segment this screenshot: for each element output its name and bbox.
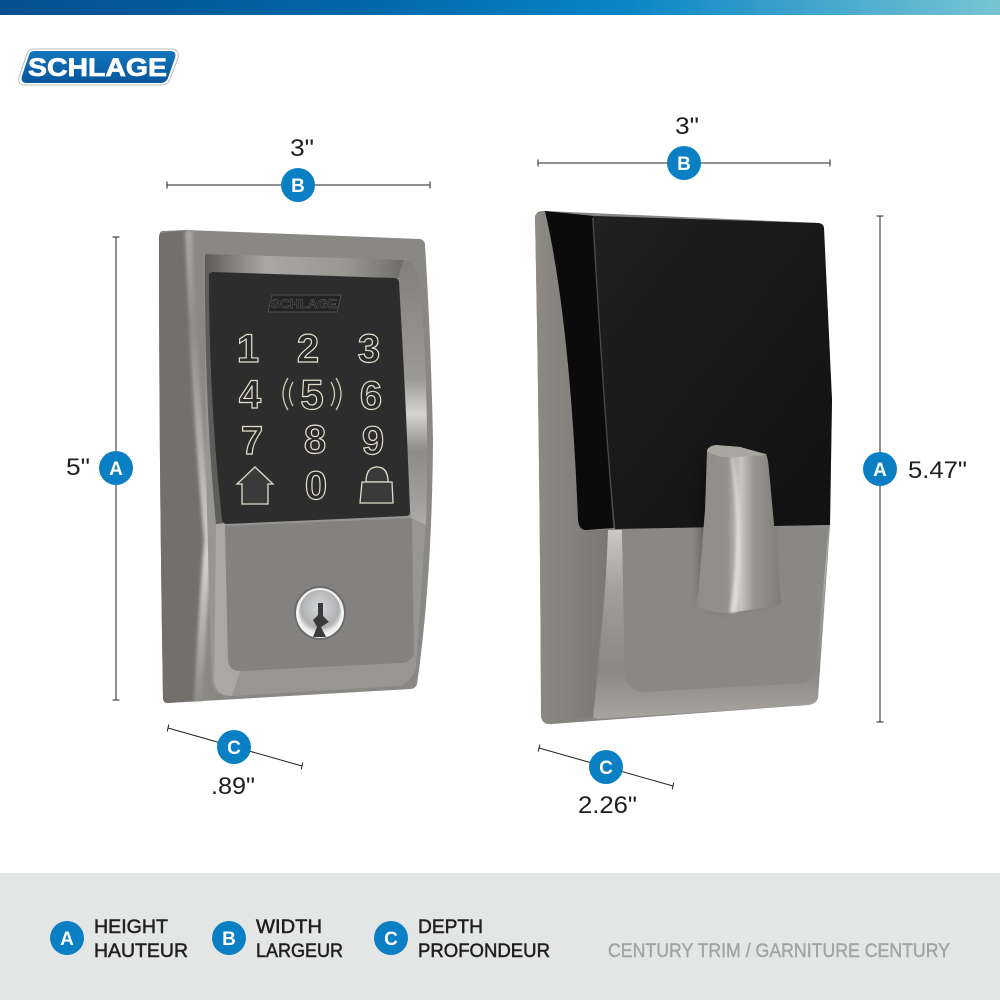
dimension: right height A	[863, 216, 967, 722]
left lock: keypad front view	[159, 230, 433, 703]
keypad digits: 1	[237, 327, 259, 371]
black cover side	[545, 211, 614, 530]
dimension: right width B: B	[677, 154, 691, 175]
top gradient bar	[0, 0, 1000, 15]
legend: depth: PROFONDEUR	[418, 941, 550, 962]
Schlage logo: SCHLAGE	[28, 54, 167, 82]
dimension: left depth C: C	[227, 738, 241, 759]
dimension: left height A: 5"	[66, 454, 90, 481]
dimension: left depth C: .89"	[211, 773, 255, 800]
lower bevel	[593, 525, 829, 719]
steel body	[535, 211, 832, 724]
bezel surround	[205, 254, 427, 696]
keypad digits: 4	[239, 373, 262, 417]
cover edge highlight	[593, 218, 614, 528]
dimension: left depth C	[167, 724, 303, 800]
legend: depth: DEPTH	[418, 917, 483, 938]
right lock: side view	[535, 211, 832, 724]
keypad digits: 8	[304, 418, 326, 462]
legend: height: A	[60, 929, 74, 950]
left side wall	[159, 230, 206, 703]
lower left bevel	[214, 524, 240, 696]
side wall	[535, 212, 610, 724]
dimension: left height A	[66, 237, 133, 700]
Schlage logo	[19, 49, 178, 85]
legend: width	[212, 917, 343, 962]
dimension: right depth C: 2.26"	[578, 792, 637, 819]
dimension: left width B	[167, 135, 430, 202]
keypad logo: SCHLAGE	[271, 297, 337, 311]
dimension: right width B	[538, 113, 830, 180]
keypad digits: 3	[358, 327, 380, 371]
top bezel	[205, 254, 404, 278]
thumb turn shadow	[700, 460, 770, 610]
left bezel	[205, 254, 223, 524]
legend: height: HEIGHT	[94, 917, 168, 938]
right bezel highlight	[398, 260, 427, 525]
legend: width: B	[222, 929, 236, 950]
keypad logo	[268, 295, 341, 312]
legend: depth: C	[384, 929, 398, 950]
recessed lower plate	[622, 525, 829, 692]
left ridge highlight	[185, 231, 212, 701]
legend: width: WIDTH	[256, 917, 322, 938]
dimension: left width B: B	[291, 176, 305, 197]
keypad glass	[209, 272, 410, 524]
outer body	[159, 230, 433, 703]
keypad digits: 7	[241, 419, 263, 463]
legend: width: LARGEUR	[256, 941, 343, 962]
trim caption: CENTURY TRIM / GARNITURE CENTURY	[608, 941, 950, 962]
legend: height	[50, 917, 188, 962]
proximity waves	[283, 378, 341, 410]
footer band	[0, 873, 1000, 1000]
black cover front	[592, 216, 832, 529]
lower recessed plate	[225, 518, 414, 671]
key cylinder	[294, 586, 346, 640]
legend: height: HAUTEUR	[94, 941, 188, 962]
keypad digits: 2	[297, 327, 319, 371]
keypad digits: 9	[362, 419, 384, 463]
house icon	[237, 467, 273, 504]
dimension: right height A: A	[873, 460, 887, 481]
dimension: left width B: 3"	[290, 135, 314, 162]
keypad digits: 5	[300, 371, 324, 418]
legend: depth	[374, 917, 550, 962]
dimension: right depth C: C	[599, 758, 613, 779]
keypad digits	[237, 327, 384, 508]
dimension: right width B: 3"	[675, 113, 699, 140]
dimension: left height A: A	[109, 459, 123, 480]
dimension: right depth C	[538, 744, 674, 819]
keypad digits: 6	[360, 374, 382, 418]
dimension: right height A: 5.47"	[908, 457, 967, 484]
padlock icon	[360, 467, 393, 503]
thumb turn	[697, 445, 781, 613]
keypad digits: 0	[305, 464, 327, 508]
